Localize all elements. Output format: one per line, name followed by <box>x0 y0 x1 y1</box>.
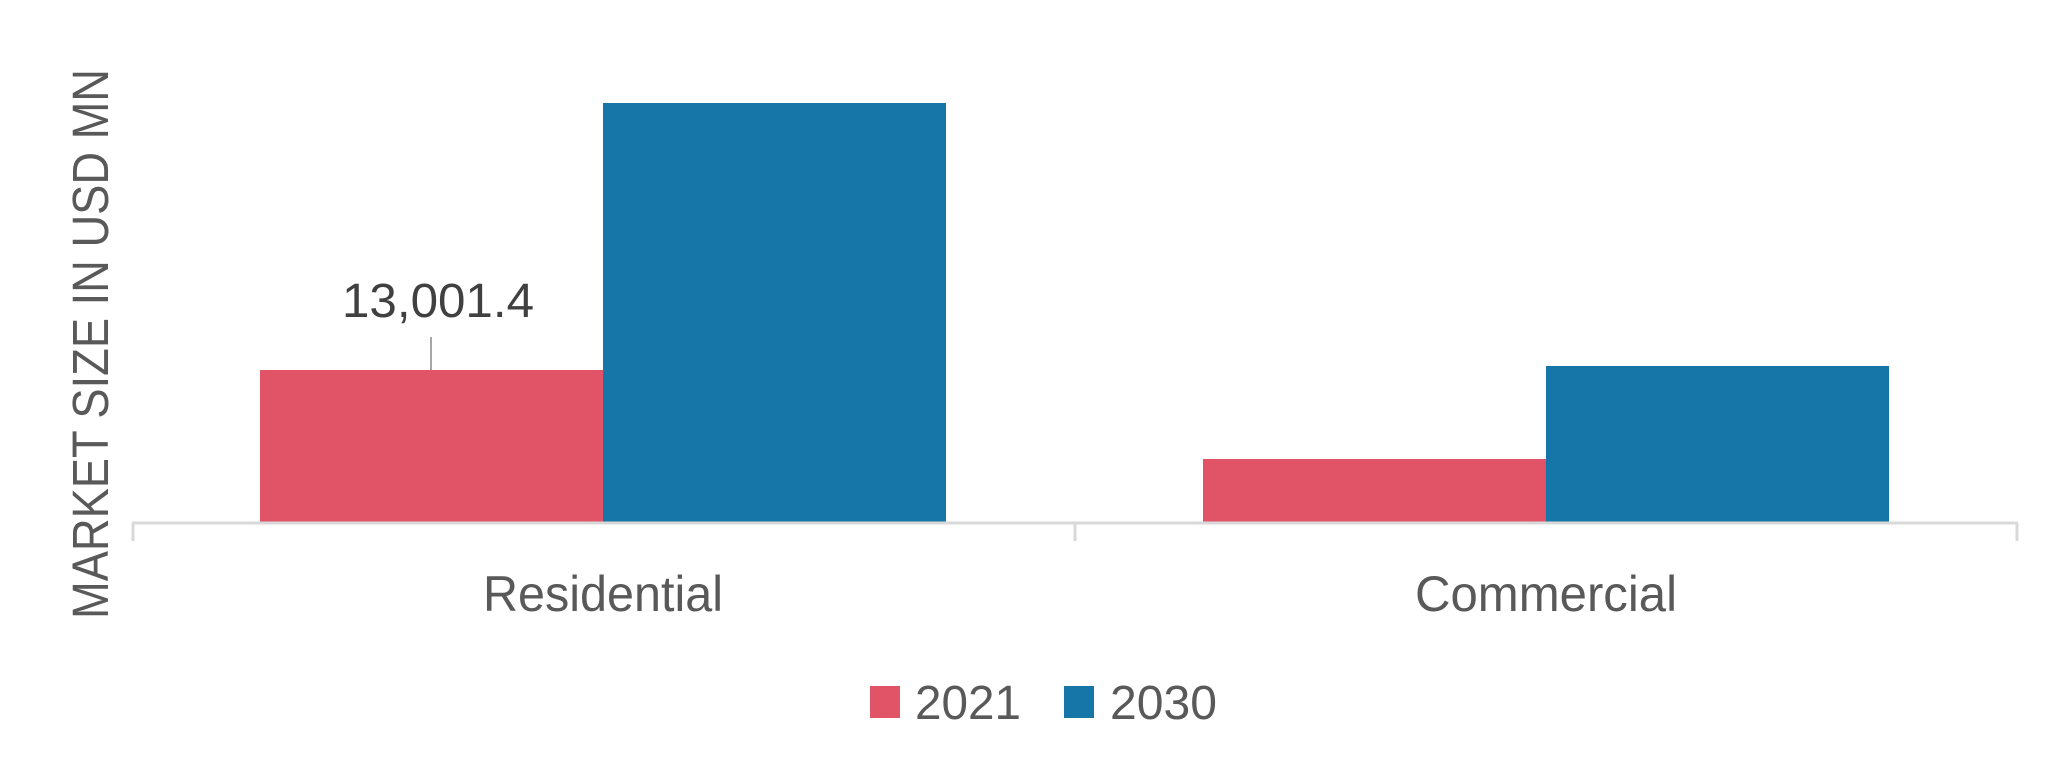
legend: 2021 <box>870 677 1021 730</box>
bar: residential 2021 <box>260 370 603 523</box>
data label leader line <box>430 337 432 370</box>
bar: commercial 2030 <box>1546 366 1889 523</box>
legend <box>870 677 1217 730</box>
category label: Residential: Residential <box>483 566 723 622</box>
category label: Commercial: Commercial <box>1415 566 1677 622</box>
bar: residential 2030 <box>603 103 946 523</box>
x axis <box>132 523 2018 541</box>
data label: 13,001.4: 13,001.4 <box>342 275 534 328</box>
legend: 2021: 2021 <box>915 677 1021 730</box>
legend: 2030: 2030 <box>1110 677 1217 730</box>
y axis title: MARKET SIZE IN USD MN <box>62 69 119 619</box>
legend: 2030 <box>1064 677 1217 730</box>
bar: commercial 2021 <box>1203 459 1546 523</box>
